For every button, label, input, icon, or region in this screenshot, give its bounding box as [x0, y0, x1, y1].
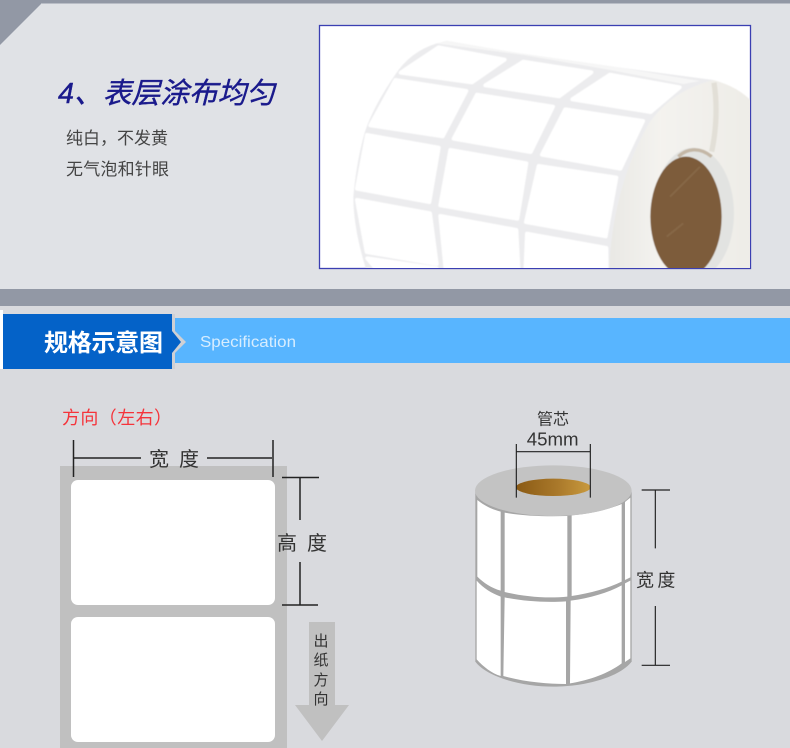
- roll labels: [477, 498, 630, 684]
- roll top face: [475, 465, 632, 516]
- roll core: [516, 479, 591, 496]
- text: coating description: 无气泡和针眼: [66, 160, 169, 179]
- diagram: label sheet: [60, 440, 349, 748]
- header: specification: [0, 310, 790, 369]
- core dimension: 管芯: [537, 411, 569, 429]
- arrow: feed direction: 出: [313, 633, 329, 650]
- height dimension: 高 度: [277, 532, 327, 555]
- height dimension: [277, 477, 327, 605]
- arrow: feed direction: 纸: [313, 652, 329, 669]
- divider band: [0, 289, 790, 306]
- label stickers: [357, 47, 680, 273]
- roll top edge strip: [437, 41, 700, 84]
- core dimension: 45mm: [527, 429, 579, 450]
- header title: 规格示意图: [44, 329, 163, 357]
- arrow: feed direction: [295, 622, 349, 741]
- width dimension: 宽 度: [149, 448, 199, 471]
- panel: specification background: [0, 306, 790, 748]
- label 2: [71, 617, 275, 742]
- heading: coating: 4、表层涂布均匀: [58, 78, 277, 110]
- photo: label roll: [320, 26, 753, 279]
- arrow: feed direction: 向: [313, 691, 329, 708]
- text: coating description: [66, 129, 169, 179]
- arrow: feed direction: 方: [313, 672, 329, 689]
- label: direction: 方向（左右）: [62, 408, 172, 428]
- roll end face: [609, 80, 753, 279]
- roll liner: [353, 43, 713, 273]
- width dimension: [74, 440, 273, 477]
- header subtitle: Specification: [200, 334, 296, 351]
- text: coating description: 纯白，不发黄: [66, 129, 168, 148]
- core dimension: [516, 411, 590, 498]
- diagram: roll: [475, 411, 675, 687]
- roll body: [475, 492, 632, 687]
- roll width dimension: [636, 490, 675, 665]
- roll width dimension: 宽 度: [636, 571, 675, 591]
- label 1: [71, 480, 275, 605]
- panel: coating section: [0, 0, 790, 289]
